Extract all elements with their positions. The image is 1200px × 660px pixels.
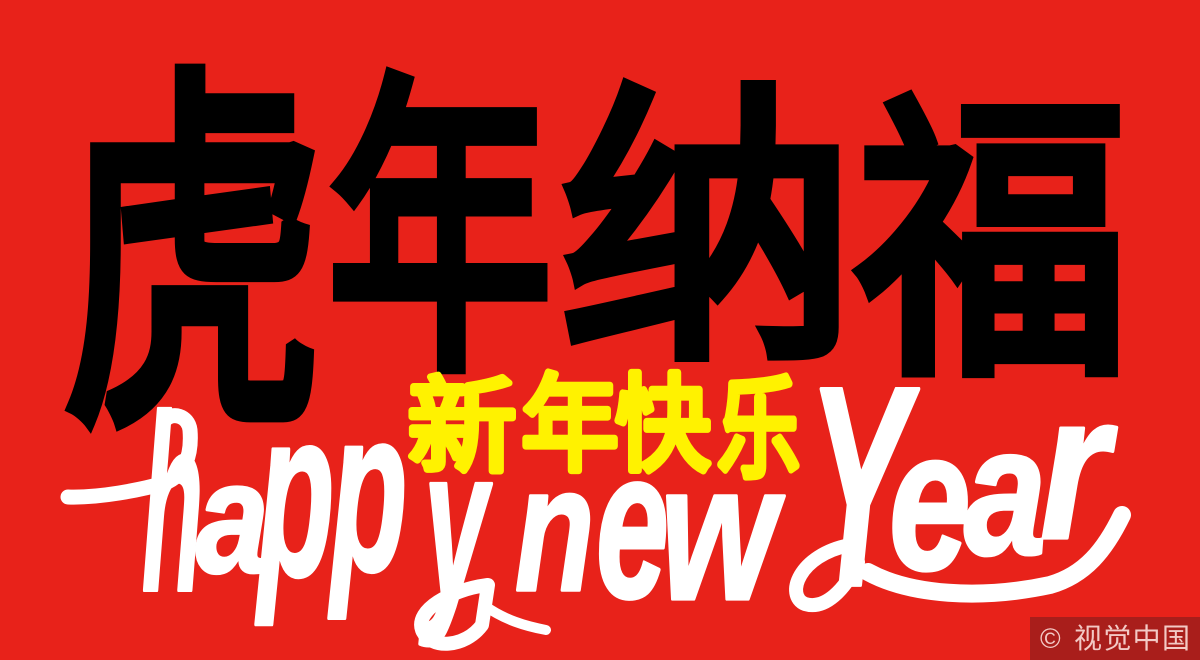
title: black brush characters: 福 [856, 77, 1129, 411]
white lettering: happy new year [142, 328, 1117, 648]
white lettering: happy new year: n [515, 430, 594, 629]
subtitle: yellow characters: 快 [615, 367, 711, 485]
subtitle: yellow characters: 乐 [717, 369, 800, 492]
watermark badge: 视觉中国 [1074, 623, 1190, 654]
white lettering: happy new year: e [596, 406, 669, 643]
title: black brush characters [62, 49, 1129, 473]
title: black brush characters: 纳 [560, 68, 855, 395]
subtitle: yellow characters [407, 366, 800, 492]
subtitle: yellow characters: 年 [521, 366, 619, 485]
white lettering: happy new year: Y [808, 328, 920, 646]
white lettering: happy new year: y [419, 402, 492, 648]
lettering flourishes [68, 416, 1122, 644]
white lettering: happy new year: r [1040, 350, 1117, 582]
title: black brush characters: 虎 [62, 49, 324, 473]
white lettering: happy new year: a [196, 429, 269, 606]
white lettering: happy new year: e [889, 389, 971, 612]
white lettering: happy new year: h [142, 365, 203, 644]
white lettering: happy new year: w [660, 423, 785, 640]
watermark badge [1030, 617, 1200, 660]
subtitle: yellow characters: 新 [407, 369, 517, 485]
title: black brush characters: 年 [328, 57, 552, 408]
white lettering: happy new year: a [964, 389, 1046, 594]
white lettering: happy new year: p [328, 361, 407, 620]
watermark badge: © [1040, 623, 1061, 654]
white lettering: happy new year: p [255, 361, 334, 626]
